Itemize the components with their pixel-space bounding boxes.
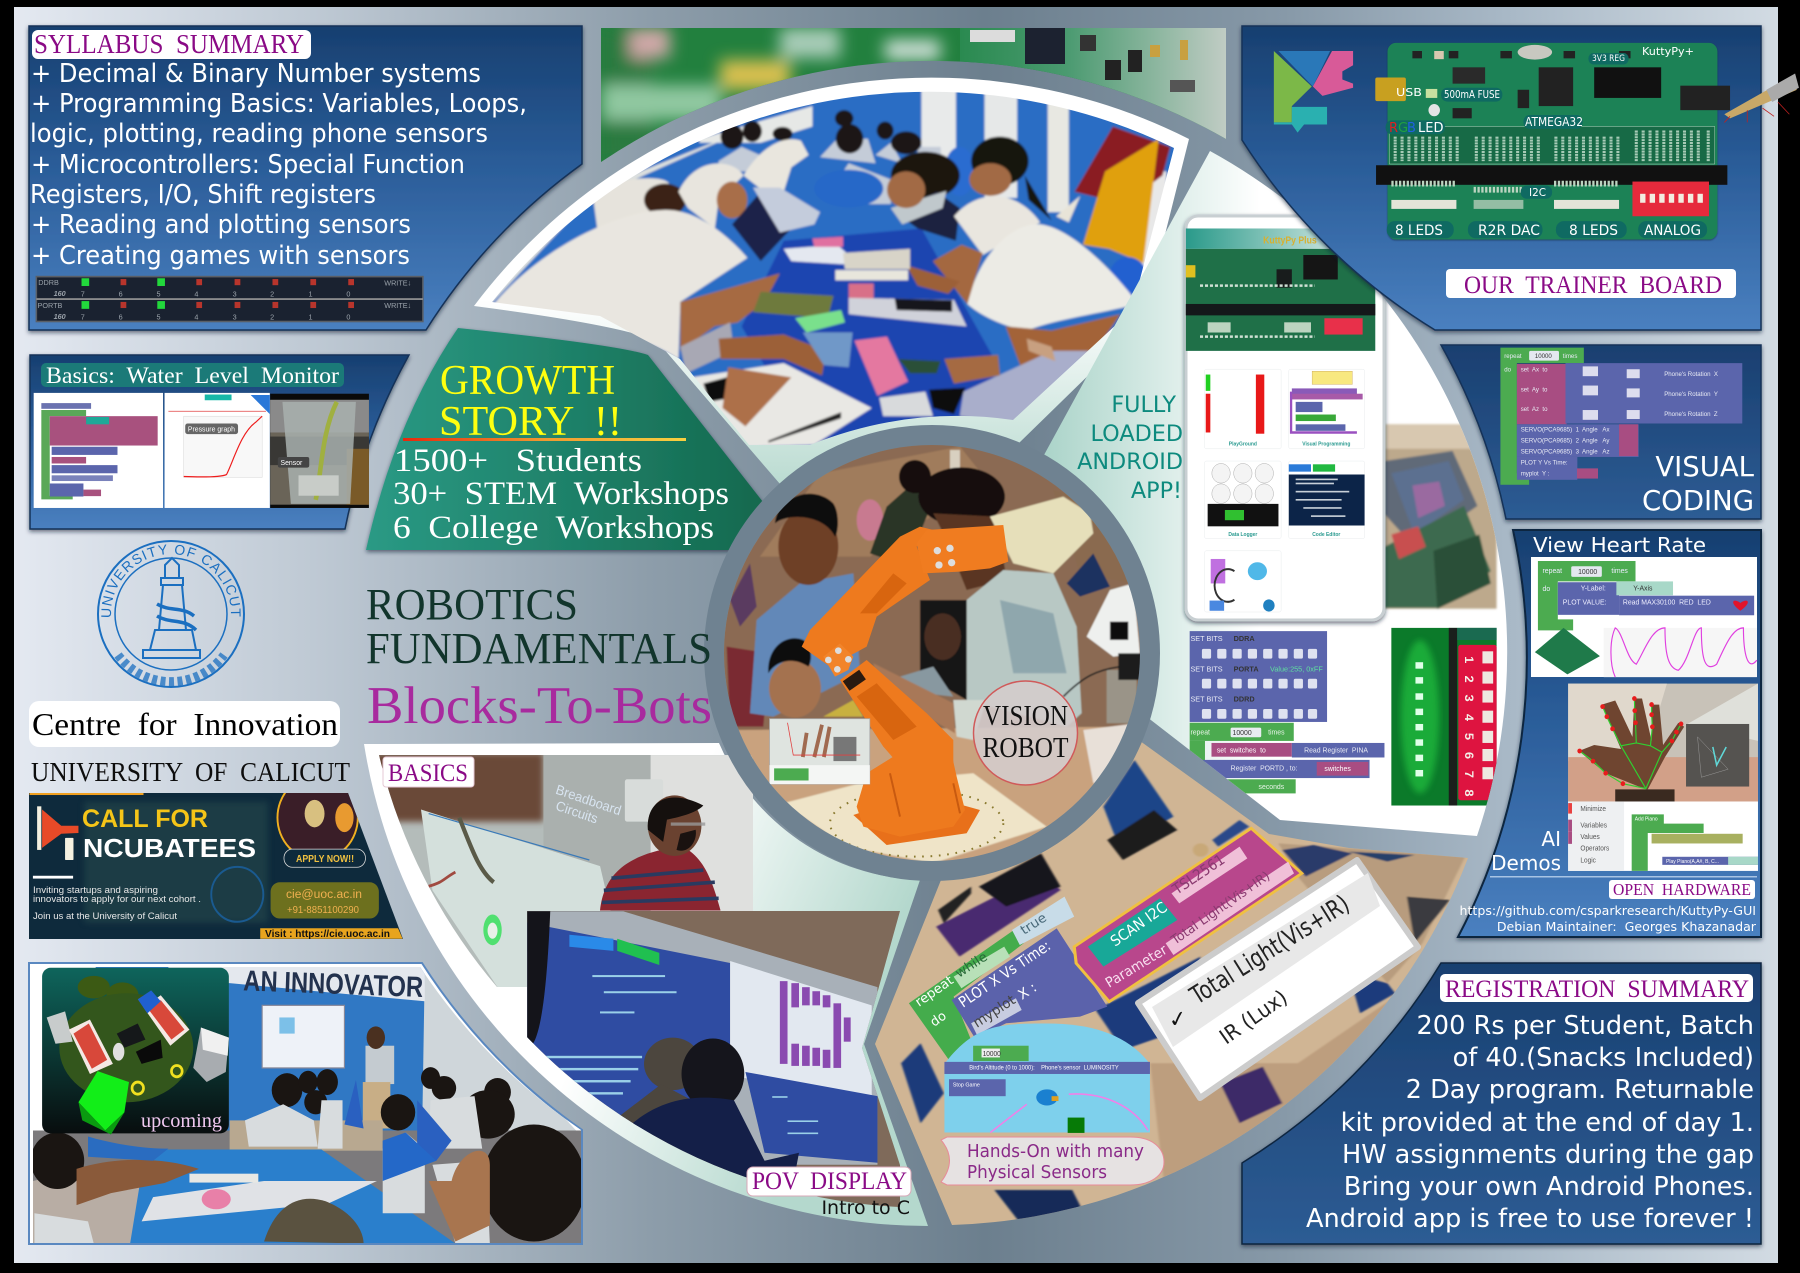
register strip widget: 2 [270,289,274,299]
syllabus list: + Programming Basics: Variables, Loops, [31,89,527,119]
hand tracking thumbnail [770,719,870,784]
blocks: set bits registers: DDRA [1234,634,1255,643]
visual blocks: do [1504,366,1512,373]
heart rate block code and plot: do [1543,585,1550,593]
label: university of calicut: UNIVERSITY OF CALICUT [31,757,350,787]
register strip widget: 5 [157,312,161,322]
robot arm [802,525,1008,857]
register strip widget: 5 [157,289,161,299]
panel: trainer board: 8 LEDS [1395,223,1443,239]
sector: sensors photo: myplot [970,992,1019,1031]
AI piano block code: Variables [1580,822,1608,829]
logo: kuttypy [1274,51,1353,133]
AI piano block code [1568,801,1758,871]
visual blocks: set Az to [1521,406,1548,413]
blocks: set bits registers: PORTA [1234,664,1259,674]
blocks: set bits registers: times [1268,728,1285,737]
panel: visual coding [1441,345,1761,519]
vision robot label: VISION [983,701,1068,732]
blocks: set bits registers: set switches to [1217,746,1266,755]
syllabus list: + Microcontrollers: Special Function [31,150,465,180]
syllabus list: Registers, I/O, Shift registers [30,180,376,210]
label: upcoming: upcoming [141,1110,222,1132]
sector: sensors photo: repeat [913,973,957,1010]
sector: sensors photo: SCAN I2C [1107,898,1171,950]
registration details: Android app is free to use forever ! [1306,1204,1754,1234]
flappy bird game screenshot: Stop Game [953,1082,980,1089]
flappy bird game screenshot: 10000 [983,1051,1001,1058]
registration details: 200 Rs per Student, Batch [1417,1011,1754,1041]
glass sensor photo: Sensor [281,459,303,467]
flappy bird game screenshot: Bird's Altitude (0 to 1000): Phone's sensor LUMINOSITY [969,1065,1119,1072]
visual block overlay [909,828,1302,1067]
photo: LEDs and dip switch: 3 [1462,694,1476,702]
syllabus list: + Reading and plotting sensors [31,210,411,240]
photo: LEDs and dip switch [1391,628,1497,806]
centre photo ring [714,435,1150,871]
panel: registration summary [1242,963,1761,1244]
label: visual coding: CODING [1642,485,1754,517]
sector: top classroom [474,61,1193,484]
visual blocks: PLOT Y Vs Time: [1521,459,1568,466]
banner: call for incubatees: CALL FOR [82,805,208,833]
dropdown: total light: Total Light(Vis+IR) [1184,889,1355,1011]
label: AI demos [1491,827,1561,875]
logo: university of calicut seal: UNIVERSITY OF CALICUT [101,544,241,617]
logo: university of calicut seal [97,540,245,688]
app card: playground: PlayGround [1229,441,1257,448]
panel: heart rate and AI demos [1458,530,1761,937]
hall, people and table [720,440,1150,870]
label: visual coding: VISUAL [1655,451,1755,483]
growth statistics: 1500+ Students [394,443,642,479]
blocks: set bits registers: Read Register PINA [1304,746,1368,755]
heart rate block code and plot: times [1611,567,1628,575]
sector: sensors photo: true [1018,911,1050,938]
photo: POV display projection [527,911,900,1211]
register strip widget: 7 [81,289,85,299]
register strip widget: 1 [308,312,312,322]
register strip widget: PORTB [38,301,62,310]
classroom photo: AN INNOVATOR [243,965,424,1004]
dropdown: total light: ✓ [1167,1006,1189,1034]
sector: sensors photo: TSL2561 [1168,850,1228,899]
label: open hardware: OPEN HARDWARE [1613,880,1751,899]
registration details: kit provided at the end of day 1. [1341,1108,1754,1138]
phone mockup [1186,216,1384,620]
AI piano block code: Play Piano(A,A#, B, C... [1666,859,1719,865]
panel: trainer board: R2R DAC [1478,223,1540,239]
panel: syllabus summary [29,26,582,330]
classroom photo with students [492,92,1174,445]
AI piano block code: Logic [1580,857,1597,864]
growth statistics [393,443,729,546]
phone mockup: KuttyPy Plus [1263,235,1317,247]
open hardware credits: https://github.com/csparkresearch/KuttyPy-GUI [1459,903,1756,918]
label: centre for innovation: Centre for Innovation [32,706,338,742]
label: fully loaded android app: LOADED [1091,421,1183,447]
photo: LEDs and dip switch: 2 [1462,676,1476,683]
blocks: set bits registers: seconds [1259,783,1285,791]
open hardware credits [1459,903,1757,934]
panel: trainer board: LED [1418,121,1443,136]
flappy bird game screenshot [944,1024,1150,1133]
registration details [1306,1011,1754,1234]
photo: breadboard lecture: Breadboard [554,782,623,818]
register strip widget: 4 [194,289,198,299]
growth story panel [366,328,763,550]
dropdown: total light: IR (Lux) [1215,985,1292,1049]
visual blocks: 10000 [1535,353,1552,360]
label: AI demos: AI [1541,827,1561,851]
title: robotics fundamentals [366,580,712,673]
label: POV display: POV DISPLAY [752,1168,907,1195]
upcoming board render [42,968,229,1135]
blocks: set bits registers: 10000 [1233,729,1252,737]
title: robotics fundamentals: FUNDAMENTALS [366,624,712,673]
register strip widget: 160 [54,312,66,321]
pressure graph screenshot [165,393,270,508]
syllabus list: + Creating games with sensors [31,241,410,271]
kuttypy trainer board [1375,43,1799,239]
open hardware credits: Debian Maintainer: Georges Khazanadar [1497,919,1757,934]
syllabus list: + Decimal & Binary Number systems [31,59,481,89]
banner: call for incubatees: cie@uoc.ac.in [286,889,362,901]
photo: LEDs and dip switch: 5 [1462,733,1476,740]
hand tracking photo [1568,684,1758,801]
title: robotics fundamentals: ROBOTICS [366,580,578,629]
callout: hands-on with sensors [941,1137,1164,1185]
visual blocks: repeat [1504,353,1522,360]
dropdown: total light [1138,860,1418,1098]
register strip widget: WRITE↓ [384,301,411,310]
blocks: set bits registers: Register PORTD , to: [1231,764,1297,772]
photo: breadboard lecture: Circuits [554,798,600,827]
app card: playground [1205,369,1281,449]
visual blocks: myplot Y : [1521,471,1550,478]
growth statistics: 30+ STEM Workshops [393,476,729,512]
blocks: set bits registers [1190,631,1384,793]
panel: trainer board [1242,26,1799,330]
app card: code editor [1289,461,1365,539]
sector: sensors photo: Parameter [1103,942,1170,991]
panel: trainer board: I2C [1529,186,1546,199]
centre photo: robot arm and students [720,440,1150,870]
sector: sensors photo [870,730,1480,1230]
banner: call for incubatees: Inviting startups and aspiring [33,885,158,896]
subtitle: blocks-to-bots: Blocks-To-Bots [367,677,712,735]
app card: visual programming: Visual Programming [1302,441,1350,448]
heart rate block code and plot: Y-Axis [1633,584,1653,592]
panel: trainer board: 500mA FUSE [1444,88,1500,101]
visual blocks: Phone's Rotation X [1664,371,1719,378]
banner: call for incubatees: +91-8851100290 [287,904,359,916]
vision robot label: ROBOT [982,733,1068,764]
sector: sensors photo: PLOT X Vs Time: [955,937,1054,1011]
visual blocks: SERVO(PCA9685) 1 Angle Ax [1521,427,1610,434]
panel: classroom photo with upcoming board [29,963,586,1246]
AI piano block code: Minimize [1580,806,1606,813]
blocks: set bits registers: DDRD [1234,694,1255,703]
banner: call for incubatees: innovators to apply for our next cohort . [33,894,201,905]
app card: about [1205,551,1281,612]
panel: trainer board: B [1407,121,1416,136]
banner: call for incubatees: Join us at the University of Calicut [33,911,177,922]
app card: data logger [1205,461,1281,539]
panel: trainer board: 3V3 REG [1592,54,1625,64]
register strip widget: 6 [119,312,123,322]
register strip widget: 6 [119,289,123,299]
banner: call for incubatees: APPLY NOW!! [296,853,354,865]
blocks: set bits registers: SET BITS [1190,694,1223,703]
label: fully loaded android app: FULLY [1111,392,1176,418]
photo: LEDs and dip switch: 7 [1462,771,1476,778]
register strip widget: 3 [233,312,237,322]
sector: sensors photo: Total Light(Vis+IR) [1168,869,1273,949]
sensor boards on wood [901,760,1465,1220]
heart rate block code and plot: repeat [1543,567,1562,575]
register strip widget: WRITE↓ [384,278,411,288]
panel: water level monitor [30,355,409,529]
heading: registration summary: REGISTRATION SUMMARY [1445,976,1749,1003]
panel: trainer board: USB [1396,86,1422,99]
blocks: set bits registers: SET BITS [1190,634,1223,643]
growth statistics: 6 College Workshops [393,510,714,546]
panel: trainer board: KuttyPy+ [1642,46,1694,58]
register strip widget: DDRB [38,278,59,287]
app card: code editor: Code Editor [1312,532,1340,538]
registration details: 2 Day program. Returnable [1406,1075,1754,1105]
label: fully loaded android app: APP! [1131,478,1182,504]
photo: LEDs and dip switch: 4 [1462,714,1476,721]
sector: android app [1044,151,1507,836]
sector: sensors photo: do [928,1009,950,1030]
banner: call for incubatees: Visit : https://cie.uoc.ac.in [265,929,390,940]
label: our trainer board: OUR TRAINER BOARD [1464,270,1722,299]
AI piano block code: Values [1580,834,1600,841]
label: view heart rate: View Heart Rate [1533,533,1706,557]
classroom photo [31,963,586,1246]
register strip widget: 0 [346,312,350,322]
glass sensor photo [270,394,369,508]
visual blocks: SERVO(PCA9685) 3 Angle Az [1521,449,1610,456]
photo: LEDs and dip switch: 1 [1462,656,1476,663]
blocks: set bits registers: repeat [1190,728,1210,737]
visual blocks: Phone's Rotation Z [1664,411,1718,418]
heart rate block code and plot: Y-Label: [1581,584,1606,592]
panel: trainer board: ANALOG [1644,223,1701,239]
register strip widget: 0 [346,289,350,299]
visual blocks: SERVO(PCA9685) 2 Angle Ay [1521,438,1610,445]
photo: LEDs and dip switch: 8 [1462,789,1476,797]
register strip widget: 4 [194,312,198,322]
heading: growth story: STORY !! [439,399,622,445]
visual blocks: Phone's Rotation Y [1664,391,1719,398]
heart rate block code and plot: PLOT VALUE: [1563,598,1607,607]
panel: trainer board: R [1389,121,1398,136]
register strip widget: 3 [233,289,237,299]
callout: hands-on with sensors: Hands-On with many [967,1142,1144,1162]
AI piano block code: Add Piano [1635,816,1658,823]
label: fully loaded android app [1077,392,1183,504]
sector: sensors photo: while [953,950,991,981]
register strip widget: 160 [54,289,66,298]
blocks: set bits registers: switches [1324,765,1351,773]
photo: phone and board on desk [1384,424,1497,609]
panel: trainer board: G [1398,121,1408,136]
blocks: set bits registers: Value:255, 0xFF [1270,664,1323,674]
callout: hands-on with sensors: Physical Sensors [967,1163,1107,1183]
heading: growth story [403,358,686,445]
syllabus list [30,59,527,271]
sector: sensors photo: X : [1015,980,1040,1003]
syllabus list: logic, plotting, reading phone sensors [30,119,488,149]
registration details: HW assignments during the gap [1342,1140,1754,1170]
heart rate block code and plot: 10000 [1578,568,1597,576]
vision robot label [974,681,1078,785]
photo: blurred circuit board strip [601,28,1226,163]
visual blocks: set Ax to [1521,366,1548,373]
label: basics: BASICS [388,760,468,787]
heart rate block code and plot [1531,557,1757,677]
banner: call for incubatees: NCUBATEES [83,835,256,863]
photo: breadboard lecture [367,750,760,990]
register strip widget: 2 [270,312,274,322]
heart rate block code and plot: Read MAX30100 RED LED [1623,598,1711,607]
panel: trainer board: 8 LEDS [1569,223,1618,239]
banner: call for incubatees [29,793,403,939]
register strip widget: 1 [308,289,312,299]
block code screenshot [34,393,163,508]
visual blocks: times [1563,353,1577,360]
visual blocks [1500,348,1742,485]
AI piano block code: Operators [1580,846,1610,853]
visual blocks: set Ay to [1521,387,1548,394]
heading: syllabus summary: SYLLABUS SUMMARY [34,29,304,59]
register strip widget [36,277,423,322]
register strip widget: 7 [81,312,85,322]
blocks: set bits registers: SET BITS [1190,664,1223,674]
app card: visual programming [1289,369,1365,449]
registration details: of 40.(Snacks Included) [1453,1043,1754,1073]
sector: basics and POV display [364,743,928,1226]
heading: water level monitor: Basics: Water Level Monitor [46,363,339,388]
heading: growth story: GROWTH [440,358,615,404]
registration details: Bring your own Android Phones. [1344,1172,1754,1202]
photo: LEDs and dip switch: 6 [1462,752,1476,759]
label: fully loaded android app: ANDROID [1077,449,1183,475]
label: visual coding [1642,451,1755,517]
label: intro to C: Intro to C [821,1197,910,1219]
label: AI demos: Demos [1491,851,1561,875]
pressure graph screenshot: Pressure graph [188,425,235,434]
app card: data logger: Data Logger [1228,532,1257,538]
panel: trainer board: ATMEGA32 [1525,115,1583,129]
